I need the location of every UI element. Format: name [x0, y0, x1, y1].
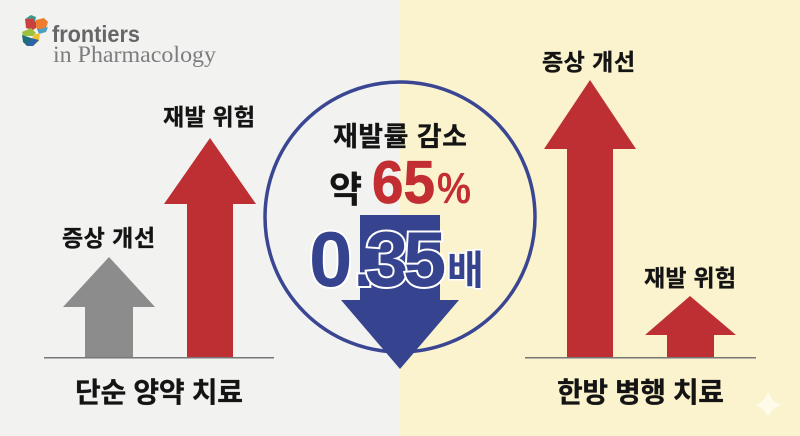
text: about 65%: 약 — [329, 169, 362, 210]
label: right relapse risk: 재발 위험 — [644, 265, 736, 291]
logo: Frontiers in Pharmacology — [22, 15, 217, 67]
wordmark: frontiers: frontiers — [52, 21, 140, 47]
wordmark: in Pharmacology: in Pharmacology — [53, 42, 217, 67]
icon: sparkle watermark — [755, 391, 782, 418]
label: left relapse risk: 재발 위험 — [163, 104, 255, 130]
heading: conventional treatment: 단순 양약 치료 — [75, 377, 243, 408]
text: about 65% — [329, 149, 471, 216]
arrow: left relapse risk (red) — [164, 138, 256, 357]
label: left symptom improvement: 증상 개선 — [62, 225, 155, 251]
label: right symptom improvement: 증상 개선 — [542, 49, 635, 75]
arrow: downward blue — [341, 215, 459, 369]
text: 0.35 times: 배 — [447, 249, 484, 293]
callout circle — [265, 82, 535, 352]
icon: coloured cubes — [22, 15, 48, 46]
text: about 65%: % — [437, 164, 471, 213]
right baseline — [525, 357, 756, 358]
text: recurrence reduction: 재발률 감소 — [333, 122, 467, 152]
arrow: right symptom improvement (red) — [544, 80, 636, 357]
arrow: right relapse risk (red, small) — [645, 296, 736, 357]
heading: combined herbal treatment: 한방 병행 치료 — [557, 377, 724, 408]
left baseline — [44, 357, 274, 358]
arrow: left symptom improvement (gray) — [63, 257, 155, 357]
text: about 65%: 65 — [372, 149, 435, 216]
text: 0.35 times: 0.35 — [309, 215, 446, 303]
